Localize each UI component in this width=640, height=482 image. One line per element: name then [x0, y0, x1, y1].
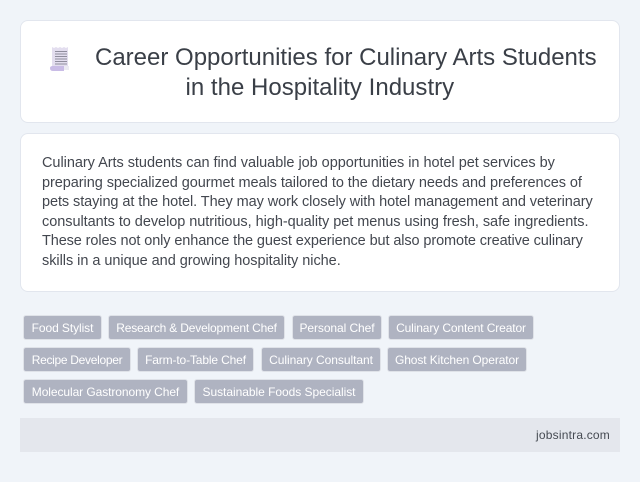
tag — [261, 347, 381, 372]
text block: Culinary Arts students can find valuable job opportunities in hotel pet services by — [42, 155, 555, 171]
text block: preparing specialized gourmet meals tailored to the dietary needs and preferences of — [42, 175, 582, 191]
tag — [23, 347, 131, 372]
heading: in the Hospitality Industry — [186, 74, 454, 101]
tag — [194, 379, 364, 404]
tag: Food Stylist — [32, 321, 93, 335]
tag — [23, 315, 102, 340]
tag — [23, 379, 188, 404]
panel: title — [20, 20, 620, 123]
tag: Farm-to-Table Chef — [145, 353, 246, 367]
tag: Personal Chef — [299, 321, 374, 335]
tag: Recipe Developer — [32, 353, 122, 367]
icon: document scroll — [50, 47, 69, 71]
text block: These roles not only enhance the guest experience but also promote creative culinary — [42, 233, 583, 249]
text block — [42, 155, 593, 269]
tag — [137, 347, 254, 372]
footer bar — [20, 418, 620, 452]
tag: Culinary Consultant — [269, 353, 373, 367]
tag: Research & Development Chef — [116, 321, 277, 335]
footer source text: jobsintra.com — [536, 428, 610, 442]
tag: Culinary Content Creator — [396, 321, 526, 335]
tag: Sustainable Foods Specialist — [202, 385, 355, 399]
tag — [388, 315, 534, 340]
tag — [108, 315, 285, 340]
text block: skills in a unique and growing hospitality niche. — [42, 253, 341, 269]
tag: Molecular Gastronomy Chef — [32, 385, 179, 399]
heading: Career Opportunities for Culinary Arts Students — [95, 44, 597, 71]
text block: consultants to develop nutritious, high-quality pet menus using fresh, safe ingredients. — [42, 214, 588, 230]
tag — [292, 315, 382, 340]
heading — [95, 44, 597, 101]
tag list — [23, 315, 534, 404]
text block: pets staying at the hotel. They may work closely with hotel management and veterinary — [42, 194, 593, 210]
tag — [387, 347, 527, 372]
tag: Ghost Kitchen Operator — [395, 353, 519, 367]
panel: description — [20, 133, 620, 292]
